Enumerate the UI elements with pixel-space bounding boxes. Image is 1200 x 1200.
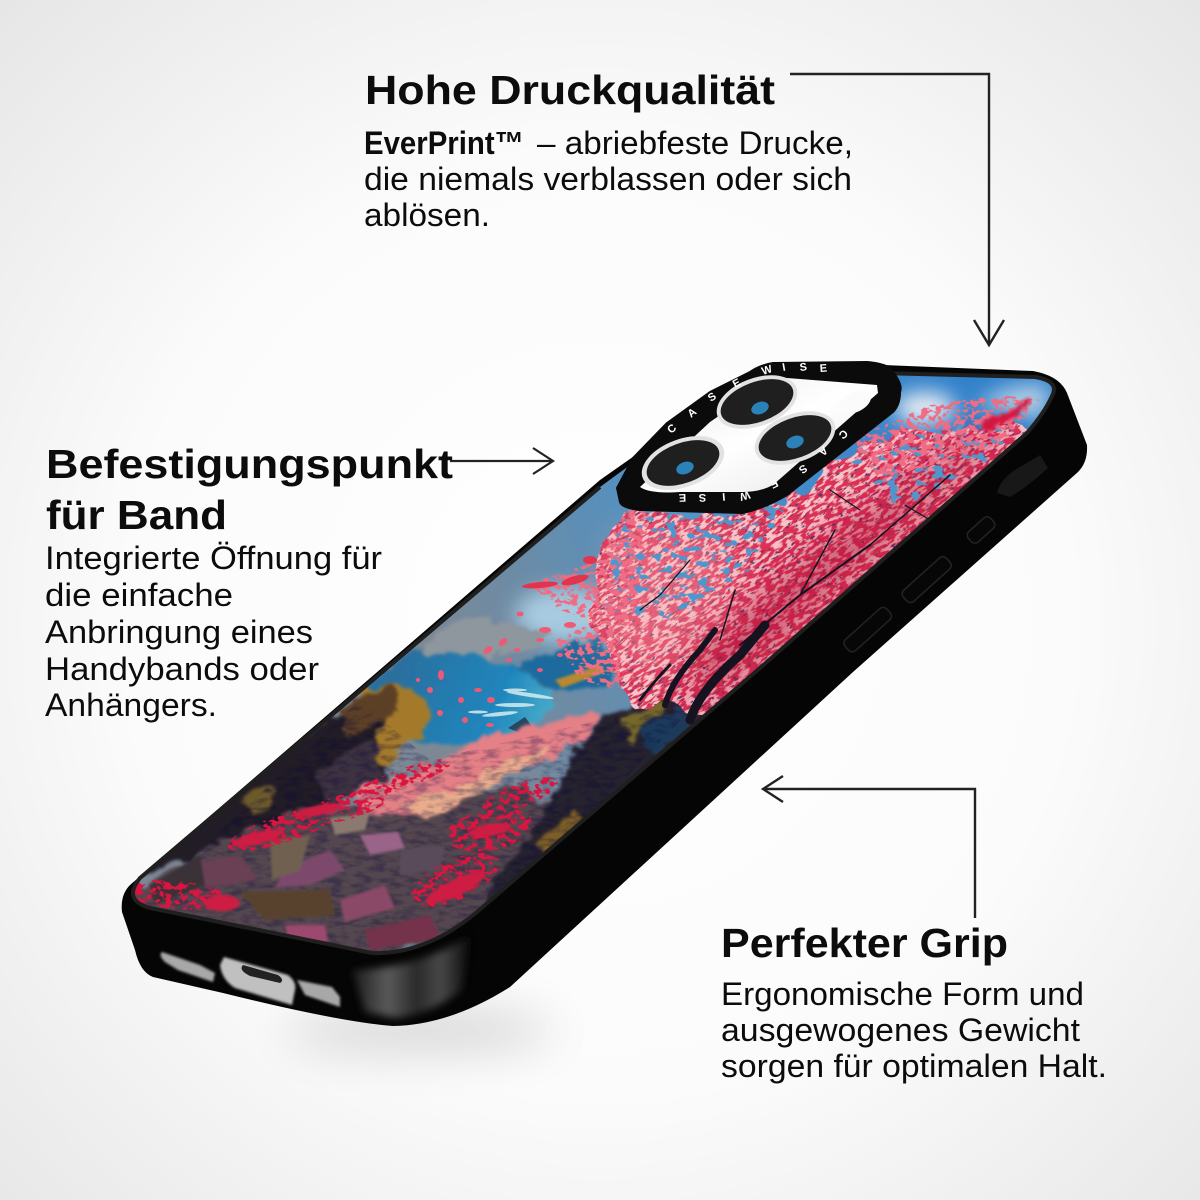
heading: strap attachment: Befestigungspunkt: [46, 441, 453, 487]
text: print quality: die niemals verblassen oder sich: [364, 161, 852, 197]
heading: print quality: Hohe Druckqualität: [365, 67, 775, 113]
text: print quality: [364, 125, 853, 233]
ground cobbles base: [120, 785, 560, 960]
branch of blossoms: [522, 556, 597, 590]
lens right: [747, 401, 843, 475]
phone case body: [122, 362, 1087, 1026]
charging port: [220, 957, 295, 1005]
red fallen petals: [135, 759, 558, 910]
grey cloud band: [420, 618, 560, 665]
bottom corner highlight: [352, 935, 470, 1018]
clouds: [515, 384, 1050, 643]
artwork rim: [133, 370, 1054, 953]
heading: strap attachment: für Band: [46, 492, 227, 538]
far hills: [515, 640, 625, 695]
pink path: [350, 712, 600, 815]
cobblestones: [150, 812, 445, 950]
text: strap attachment: [45, 540, 382, 723]
left speaker: [161, 952, 215, 982]
arrow: print quality: [790, 74, 1004, 345]
text: print quality: ablösen.: [364, 197, 490, 233]
text: strap attachment: Anbringung eines: [45, 614, 313, 650]
text: strap attachment: Handybands oder: [45, 651, 319, 687]
sky gaps in tree: [600, 410, 1030, 620]
text: grip: [721, 976, 1107, 1084]
text: strap attachment: Anhängers.: [45, 687, 217, 723]
heading: strap attachment: [46, 441, 453, 538]
text: print quality: EverPrint™: [364, 125, 524, 161]
flash: [835, 386, 875, 418]
phone shadow: [285, 1008, 555, 1052]
camera brand top: CASEWISE: [665, 361, 828, 436]
lens top: [709, 365, 805, 439]
text: strap attachment: die einfache: [45, 577, 233, 613]
brush grain overlay: [146, 700, 686, 951]
red top branch: [980, 400, 1035, 433]
falling petals: [416, 612, 576, 727]
text: print quality: – abriebfeste Drucke,: [537, 125, 853, 161]
sky: [139, 375, 1052, 950]
camera plate: [640, 378, 878, 492]
sea: [365, 652, 555, 745]
dark rock in sea: [508, 717, 532, 732]
cherry tree blossoms dense: [588, 418, 1028, 716]
orange strokes on hills: [555, 665, 605, 688]
heading: grip: Perfekter Grip: [721, 920, 1008, 966]
dark left bushes: [130, 715, 395, 878]
printed artwork: [134, 375, 1052, 952]
cherry tree blossoms sparse: [525, 395, 1040, 690]
text: grip: ausgewogenes Gewicht: [721, 1012, 1080, 1048]
arrow: strap attachment: [450, 448, 553, 474]
light pink shading on tree: [600, 525, 740, 680]
lens left: [634, 426, 732, 500]
dark right shrubs: [484, 700, 703, 902]
tree trunks: [640, 475, 950, 720]
right speaker: [297, 980, 340, 1007]
side switch: [997, 455, 1048, 497]
camera brand bottom: CASEWISE: [679, 427, 850, 503]
phone: [122, 361, 1088, 1026]
text: strap attachment: Integrierte Öffnung für: [45, 540, 382, 576]
side buttons: [842, 515, 997, 654]
foam: [468, 688, 554, 718]
text: grip: Ergonomische Form und: [721, 976, 1084, 1012]
red petal clusters: [204, 801, 513, 911]
deep red shading on tree: [690, 430, 1020, 710]
text: grip: sorgen für optimalen Halt.: [721, 1048, 1107, 1084]
arrow: grip: [763, 776, 975, 918]
camera ring: [617, 362, 901, 513]
